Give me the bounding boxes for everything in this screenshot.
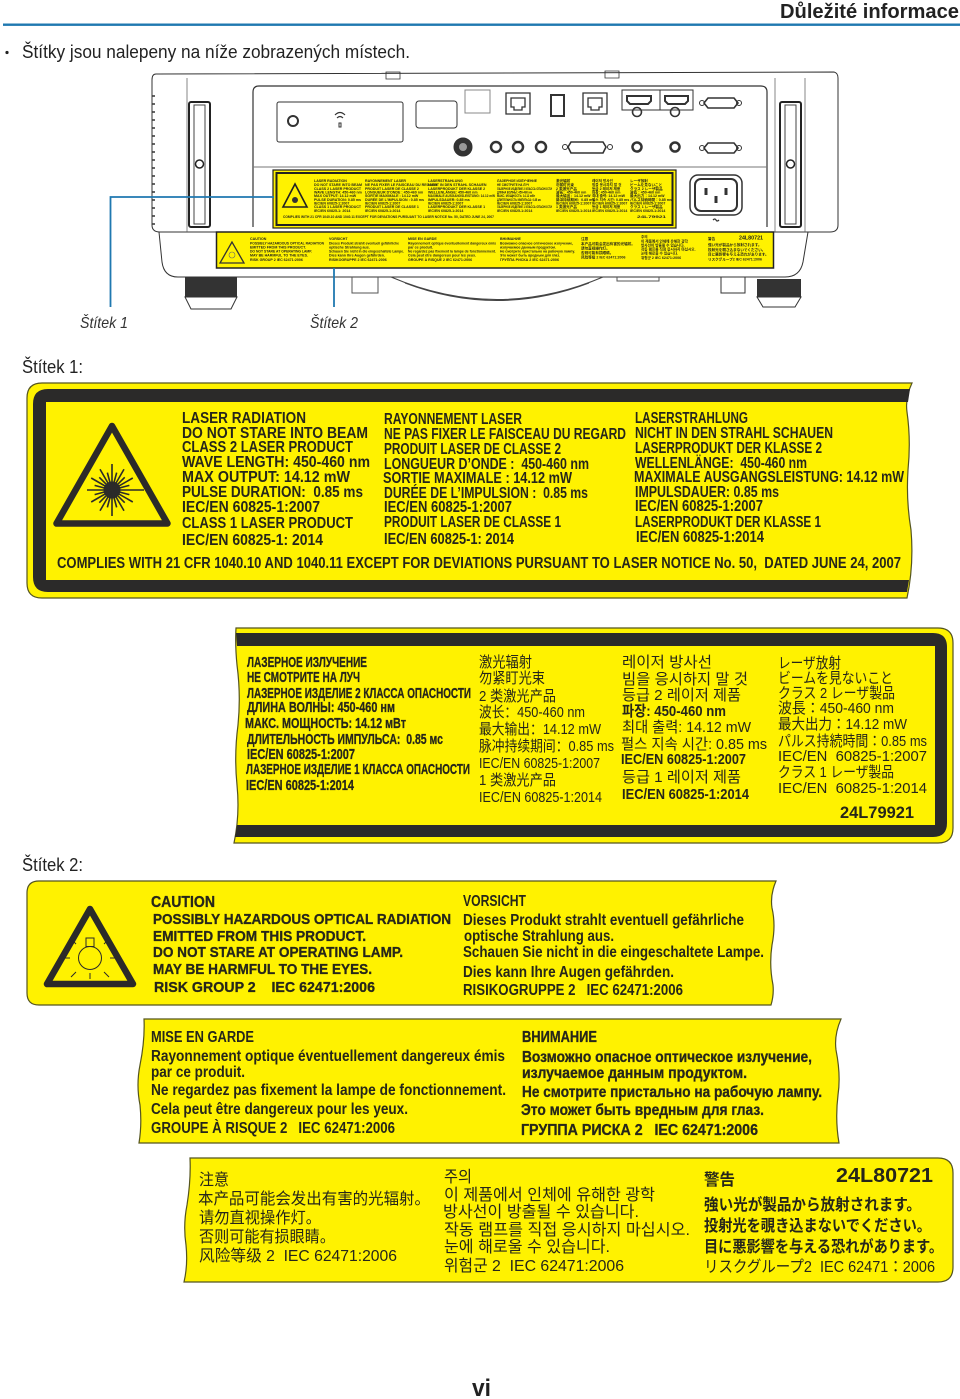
text: Chinese: 激光辐射 bbox=[479, 654, 532, 671]
text: Japanese: 投射光を覗き込まないでください。 bbox=[704, 1216, 931, 1235]
text: Russian: Это может быть вредным для глаз. bbox=[521, 1102, 764, 1119]
mini label 1 on projector: 最大出力：14.12 mW bbox=[630, 193, 665, 198]
projector rear drawing bbox=[152, 71, 838, 309]
text: Chinese: 波长：450-460 nm bbox=[479, 704, 585, 721]
text: Russian: ЛАЗЕРНОЕ ИЗДЕЛИЕ 1 КЛАССА ОПАСНОСТИ bbox=[246, 761, 470, 778]
text: English bbox=[182, 410, 370, 549]
text: Chinese: 请勿直视操作灯。 bbox=[199, 1209, 321, 1227]
mini label 1 on projector: LONGUEUR D'ONDE : 450-460 nm bbox=[365, 190, 423, 194]
mini label 1 on projector: 脉冲持续期间：0.85 ms bbox=[556, 197, 594, 202]
mini label 1 on projector: IEC/EN 60825-1:2014 bbox=[497, 209, 532, 213]
mini label 2 on projector: optische Strahlung aus. bbox=[329, 246, 370, 250]
mini label 2 on projector: MAY BE HARMFUL TO THE EYES. bbox=[250, 254, 308, 258]
text: French: PRODUIT LASER DE CLASSE 2 bbox=[384, 441, 561, 458]
text: German: LASERSTRAHLUNG bbox=[635, 410, 748, 427]
text: Japanese: 警告 bbox=[704, 1170, 735, 1189]
mini label 1 on projector: LASER RADIATION bbox=[314, 179, 347, 183]
mini label 2 on projector: 이 제품에서 인체에 유해한 광학 bbox=[641, 238, 689, 244]
bullet intro text: Štítky jsou nalepeny na níže zobrazených místech. bbox=[22, 41, 410, 62]
text: French: Ne regardez pas fixement la lampe de fonctionnement. bbox=[151, 1082, 506, 1099]
mini label 1 on projector: IEC/EN 60825-1:2014 bbox=[630, 209, 665, 213]
text: French: MISE EN GARDE bbox=[151, 1029, 254, 1046]
mini label 1 on projector: RAYONNEMENT LASER bbox=[365, 179, 406, 183]
text: English: RISK GROUP 2 IEC 62471:2006 bbox=[154, 979, 375, 996]
text: Chinese: 1 类激光产品 bbox=[479, 772, 556, 789]
text: Japanese: レーザ放射 bbox=[778, 655, 841, 672]
mini label 1 on projector: NE PAS FIXER LE FAISCEAU DU REGARD bbox=[365, 183, 438, 187]
yellow label shape bbox=[138, 1019, 841, 1143]
mini label 2 on projector: POSSIBLY HAZARDOUS OPTICAL RADIATION bbox=[250, 242, 324, 246]
text: Chinese bbox=[479, 654, 614, 806]
text: Russian: ДЛИНА ВОЛНЫ: 450-460 нм bbox=[247, 699, 395, 716]
mini label 2 on projector: DO NOT STARE AT OPERATING LAMP. bbox=[250, 250, 312, 254]
mini label 1 on projector: IMPULSDAUER: 0.85 ms bbox=[428, 198, 470, 202]
mini label 2 on projector: 投射光を覗き込まないでください。 bbox=[708, 247, 765, 252]
text: Russian bbox=[521, 1029, 822, 1139]
text: French bbox=[151, 1029, 506, 1137]
text: German: IEC/EN 60825-1:2014 bbox=[636, 529, 764, 546]
mini label 1 on projector: ビームを見ないこと bbox=[630, 182, 663, 187]
mini label 1 on projector: MAX OUTPUT: 14.12 mW bbox=[314, 194, 357, 198]
text: Chinese: IEC/EN 60825-1:2014 bbox=[479, 789, 602, 806]
text: Chinese: 脉冲持续期间：0.85 ms bbox=[479, 738, 614, 755]
mini label 2 on projector: ВНИМАНИЕ bbox=[500, 237, 522, 241]
mini label 1 on projector: 激光辐射 bbox=[556, 178, 571, 183]
text: German: IEC/EN 60825-1:2007 bbox=[635, 498, 763, 515]
mini label 2 on projector: 24L80721 bbox=[739, 236, 763, 242]
mini label 1 on projector: IEC/EN 60825-1:2007 bbox=[556, 202, 591, 206]
icon: lamp warning triangle bbox=[47, 909, 133, 984]
text: French: IEC/EN 60825-1:2007 bbox=[384, 499, 512, 516]
mini label 1 on projector: МАКС. МОЩНОСТЬ: 14.12 мВт bbox=[497, 194, 535, 198]
text: French: NE PAS FIXER LE FAISCEAU DU REGARD bbox=[384, 426, 626, 443]
yellow label shape bbox=[184, 1158, 953, 1282]
mini label 1 on projector: 등급 1 레이저 제품 bbox=[592, 204, 621, 209]
text: Korean: IEC/EN 60825-1:2014 bbox=[622, 786, 750, 803]
mini label 2 on projector: EMITTED FROM THIS PRODUCT. bbox=[250, 246, 306, 250]
text: Korean bbox=[621, 654, 767, 803]
text: German: IMPULSDAUER: 0.85 ms bbox=[635, 484, 779, 501]
mini label 1 on projector: 레이저 방사선 bbox=[592, 178, 613, 183]
caption: Štítek 1: Štítek 1 bbox=[80, 313, 128, 332]
text: English: PULSE DURATION: 0.85 ms bbox=[182, 484, 363, 501]
text: Russian: ГРУППА РИСКА 2 IEC 62471:2006 bbox=[521, 1122, 758, 1139]
text: French: PRODUIT LASER DE CLASSE 1 bbox=[384, 514, 561, 531]
mini label 1 on projector: 最大输出：14.12 mW bbox=[556, 193, 591, 198]
text: Japanese: クラス 2 レーザ製品 bbox=[778, 685, 895, 702]
mini label 1 on projector: IEC/EN 60825-1:2014 bbox=[428, 209, 463, 213]
mini label 1 on projector: 波长：450-460 nm bbox=[556, 190, 586, 194]
text: German: WELLENLÄNGE: 450-460 nm bbox=[635, 455, 807, 472]
panel: label 2 Chinese, Korean, Japanese bbox=[184, 1158, 953, 1282]
mini label 2 on projector bbox=[216, 232, 774, 268]
text: English: IEC/EN 60825-1: 2014 bbox=[182, 532, 323, 549]
text: Russian: ЛАЗЕРНОЕ ИЗЛУЧЕНИЕ bbox=[247, 654, 367, 671]
text: German: RISIKOGRUPPE 2 IEC 62471:2006 bbox=[463, 982, 683, 999]
mini label 1 on projector: IEC/EN 60825-1:2007 bbox=[497, 202, 532, 206]
mini label 1 on projector: НЕ СМОТРИТЕ НА ЛУЧ bbox=[497, 183, 529, 187]
mini label 1 on projector: IEC/EN 60825-1: 2014 bbox=[314, 209, 350, 213]
mini label 1 on projector: IEC/EN 60825-1:2007 bbox=[314, 202, 349, 206]
mini label 1 on projector: DO NOT STARE INTO BEAM bbox=[314, 183, 362, 187]
mini label 1 on projector: 1 类激光产品 bbox=[556, 204, 577, 209]
mini label 1 on projector: 빔을 응시하지 말 것 bbox=[592, 182, 622, 187]
mini label 1 on projector: IEC/EN 60825-1:2007 bbox=[428, 202, 463, 206]
text: German: Dies kann Ihre Augen gefährden. bbox=[463, 964, 674, 981]
mini label 1 on projector: ЛАЗЕРНОЕ ИЗДЕЛИЕ 1 КЛАССА ОПАСНОСТИ bbox=[497, 205, 552, 209]
mini label 1 on projector: 勿紧盯光束 bbox=[556, 182, 574, 187]
mini label 1 on projector: ЛАЗЕРНОЕ ИЗДЕЛИЕ 2 КЛАССА ОПАСНОСТИ bbox=[497, 187, 552, 191]
text: English: EMITTED FROM THIS PRODUCT. bbox=[153, 928, 366, 945]
mini label 2 on projector: VORSICHT bbox=[329, 237, 348, 241]
mini label 1 on projector: CLASS 1 LASER PRODUCT bbox=[314, 205, 362, 209]
mini label 2 on projector: 작동 램프를 직접 응시하지 마십시오. bbox=[641, 246, 696, 252]
mini label 2 on projector: Возможно опасное оптическое излучение, bbox=[500, 242, 573, 246]
text: English: DO NOT STARE INTO BEAM bbox=[182, 425, 368, 442]
mini label 2 on projector: 위험군 2 IEC 62471:2006 bbox=[641, 255, 681, 260]
yellow label frame bbox=[234, 628, 953, 843]
mini label 2 on projector: リスクグループ2 IEC 62471:2006 bbox=[708, 256, 762, 262]
mini label 1 on projector: IEC/EN 60825-1:2014 bbox=[365, 209, 400, 213]
text: Korean: 파장: 450-460 nm bbox=[622, 703, 726, 720]
text: French: IEC/EN 60825-1: 2014 bbox=[384, 531, 514, 548]
text: Russian: ВНИМАНИЕ bbox=[522, 1029, 597, 1046]
mini label 2 on projector: 눈에 해로울 수 있습니다. bbox=[641, 250, 678, 256]
mini label 1 on projector: PRODUIT LASER DE CLASSE 2 bbox=[365, 187, 419, 191]
text: Korean: IEC/EN 60825-1:2007 bbox=[621, 751, 746, 768]
mini label 1 on projector: MAXIMALE AUSGANGSLEISTUNG: 14.12 mW bbox=[428, 194, 496, 198]
text: Japanese: IEC/EN 60825-1:2007 bbox=[778, 748, 927, 765]
mini label 2 on projector: CAUTION bbox=[250, 237, 267, 241]
mini label 2 on projector: GROUPE À RISQUE 2 IEC 62471:2006 bbox=[408, 257, 472, 262]
text: Russian: IEC/EN 60825-1:2007 bbox=[247, 746, 355, 763]
text: English: POSSIBLY HAZARDOUS OPTICAL RADIATION bbox=[153, 911, 451, 928]
text: Korean: 이 제품에서 인체에 유해한 광학 bbox=[444, 1186, 655, 1204]
text: English: LASER RADIATION bbox=[182, 410, 306, 427]
text: German: VORSICHT bbox=[463, 893, 526, 910]
text: Japanese: リスクグループ2 IEC 62471：2006 bbox=[704, 1258, 935, 1276]
mini label 2 on projector: 주의 bbox=[641, 234, 648, 239]
mini label 1 on projector: SORTIE MAXIMALE : 14.12 mW bbox=[365, 194, 419, 198]
mini label 2 on projector: 방사선이 방출될 수 있습니다. bbox=[641, 242, 685, 248]
mini label 2 on projector: Schauen Sie nicht in die eingeschaltete Lampe. bbox=[329, 250, 404, 254]
text: French bbox=[383, 411, 626, 548]
mini label 1 on projector: WELLENLÄNGE: 450-460 nm bbox=[428, 190, 478, 194]
text: English: MAX OUTPUT: 14.12 mW bbox=[182, 469, 350, 486]
text: Korean bbox=[443, 1168, 690, 1275]
mini label 2 on projector: RISK GROUP 2 IEC 62471:2006 bbox=[250, 258, 303, 262]
mini label 2 on projector: 请勿直视操作灯。 bbox=[581, 246, 610, 250]
mini label 1 on projector: IEC/EN 60825-1:2014 bbox=[592, 209, 627, 213]
page header: Důležité informace: Důležité informace bbox=[780, 1, 959, 23]
mini label 2 on projector: ГРУППА РИСКА 2 IEC 62471:2006 bbox=[500, 258, 559, 262]
text: Japanese: クラス 1 レーザ製品 bbox=[778, 764, 894, 781]
mini label 2 on projector: 強い光が製品から放射されます。 bbox=[708, 242, 762, 247]
mini label 1 on projector: ДЛИНА ВОЛНЫ: 450-460 нм bbox=[497, 190, 532, 194]
text: Chinese: 注意 bbox=[199, 1170, 229, 1189]
text: Russian: Не смотрите пристально на рабочую лампу. bbox=[522, 1084, 822, 1101]
mini label 1 on projector: クラス 2 レーザ製品 bbox=[630, 186, 663, 191]
mini label 2 on projector: Ne regardez pas fixement la lampe de fonctionnement. bbox=[408, 250, 496, 254]
text: Chinese bbox=[198, 1170, 430, 1265]
text: Japanese: 最大出力：14.12 mW bbox=[778, 716, 908, 733]
mini label 2 on projector: 否则可能有损眼睛。 bbox=[581, 250, 613, 255]
text: Korean: 등급 1 레이저 제품 bbox=[622, 769, 741, 786]
panel: label 1 left part bbox=[27, 383, 912, 598]
mini label 1 on projector: 펄스 지속 시간: 0.85 ms bbox=[592, 197, 629, 202]
text: English: CLASS 2 LASER PRODUCT bbox=[182, 439, 353, 456]
text: Chinese: 风险等级 2 IEC 62471:2006 bbox=[199, 1247, 397, 1265]
text: Chinese: 本产品可能会发出有害的光辐射。 bbox=[198, 1190, 430, 1208]
panel: label 2 French and Russian bbox=[138, 1019, 841, 1143]
text: English: DO NOT STARE AT OPERATING LAMP. bbox=[153, 944, 403, 961]
part number 24L79921: 24L79921 bbox=[840, 803, 914, 822]
mini label 2 on projector: Dies kann Ihre Augen gefährden. bbox=[329, 254, 385, 258]
mini label 1 on projector: 파장: 450-460 nm bbox=[592, 190, 620, 194]
mini label 1 on projector: IEC/EN 60825-1:2007 bbox=[365, 202, 400, 206]
text: Korean: 위험군 2 IEC 62471:2006 bbox=[444, 1257, 624, 1275]
mini label 1 on projector: PULSE DURATION: 0.85 ms bbox=[314, 198, 361, 202]
mini label 1 on projector: レーザ放射 bbox=[630, 178, 648, 183]
text: English: MAY BE HARMFUL TO THE EYES. bbox=[153, 961, 372, 978]
text: Russian: IEC/EN 60825-1:2014 bbox=[246, 777, 354, 794]
text: Russian: излучаемое данным продуктом. bbox=[522, 1065, 747, 1082]
text: Japanese bbox=[778, 655, 927, 797]
yellow label frame bbox=[27, 383, 912, 598]
text: German: Dieses Produkt strahlt eventuell gefährliche bbox=[463, 912, 744, 929]
mini label 1 on projector: ЛАЗЕРНОЕ ИЗЛУЧЕНИЕ bbox=[497, 179, 538, 183]
text: Japanese: ビームを見ないこと bbox=[778, 670, 893, 687]
text: Japanese bbox=[704, 1170, 943, 1276]
mini label 1 on projector: IEC/EN 60825-1:2007 bbox=[592, 202, 627, 206]
connector panel bbox=[277, 90, 742, 156]
text: German: LASERPRODUKT DER KLASSE 2 bbox=[635, 440, 822, 457]
text: Korean: 빔을 응시하지 말 것 bbox=[622, 671, 748, 688]
mini label 1 on projector bbox=[273, 170, 676, 228]
mini label 1 on projector: ДЛИТЕЛЬНОСТЬ ИМПУЛЬСА: 0.85 мс bbox=[497, 198, 541, 202]
text: French: LONGUEUR D’ONDE : 450-460 nm bbox=[384, 456, 589, 473]
text: Chinese: 2 类激光产品 bbox=[479, 688, 556, 705]
text: English bbox=[151, 894, 451, 996]
mini label 2 on projector: MISE EN GARDE bbox=[408, 237, 437, 241]
text: Korean: 펄스 지속 시간: 0.85 ms bbox=[621, 736, 767, 753]
mini label 1 on projector: 波長：450-460 nm bbox=[630, 190, 660, 194]
mini label 1 on projector: クラス 1 レーザ製品 bbox=[630, 204, 663, 209]
mini label 1 on projector: COMPLIES WITH 21 CFR 1040.10 AND 1040.11 EXCEPT FOR DEVIATIONS PURSUANT TO LASER NOTICE No. 50, DATED JUNE 24, 2007 bbox=[283, 215, 494, 219]
mini label 1 on projector: IEC/EN 60825-1:2014 bbox=[556, 209, 591, 213]
mini label 2 on projector: Это может быть вредным для глаз. bbox=[500, 254, 560, 258]
text: Russian: ЛАЗЕРНОЕ ИЗДЕЛИЕ 2 КЛАССА ОПАСНОСТИ bbox=[247, 685, 471, 702]
text: German: optische Strahlung aus. bbox=[464, 928, 614, 945]
text: French: Rayonnement optique éventuellement dangereux émis bbox=[151, 1048, 505, 1065]
mini label 1 on projector: LASERPRODUKT DER KLASSE 1 bbox=[428, 205, 485, 209]
text: Russian: НЕ СМОТРИТЕ НА ЛУЧ bbox=[247, 669, 360, 686]
text: English: CAUTION bbox=[151, 894, 215, 911]
text: Japanese: パルス持続時間：0.85 ms bbox=[778, 733, 927, 750]
leader lines to labels bbox=[110, 197, 334, 307]
mini label 1 on projector: 최대 출력: 14.12 mW bbox=[592, 193, 626, 198]
text: English: CLASS 1 LASER PRODUCT bbox=[182, 515, 353, 532]
mini label 2 on projector: 目に悪影響を与える恐れがあります。 bbox=[708, 252, 769, 256]
mini label 1 on projector: PRODUIT LASER DE CLASSE 1 bbox=[365, 205, 419, 209]
text: French: Cela peut être dangereux pour les yeux. bbox=[151, 1101, 408, 1118]
panel: label 1 right part bbox=[234, 628, 953, 843]
text: English: WAVE LENGTH: 450-460 nm bbox=[182, 454, 370, 471]
text: Korean: 작동 램프를 직접 응시하지 마십시오. bbox=[444, 1221, 690, 1239]
mini label 1 on projector: LASERPRODUKT DER KLASSE 2 bbox=[428, 187, 485, 191]
mini label 2 on projector: 本产品可能会发出有害的光辐射。 bbox=[581, 241, 635, 246]
projector body outline bbox=[152, 71, 838, 277]
text: French: RAYONNEMENT LASER bbox=[384, 411, 522, 428]
text: Korean: 등급 2 레이저 제품 bbox=[622, 687, 741, 704]
text: German: LASERPRODUKT DER KLASSE 1 bbox=[635, 514, 821, 531]
heading: Štítek 2: Štítek 2: bbox=[22, 854, 83, 875]
mini label 2 on projector: Dieses Produkt strahlt eventuell gefährliche bbox=[329, 242, 399, 246]
text: Korean: 최대 출력: 14.12 mW bbox=[622, 719, 752, 736]
text: Japanese: 強い光が製品から放射されます。 bbox=[704, 1195, 921, 1214]
mini label 2 on projector: Не смотрите пристально на рабочую лампу. bbox=[500, 250, 575, 254]
text: German bbox=[463, 893, 764, 999]
feet and handle bbox=[185, 277, 801, 309]
text: German: Schauen Sie nicht in die eingeschaltete Lampe. bbox=[463, 944, 764, 961]
mini label 1 on projector: IEC/EN 60825-1:2007 bbox=[630, 202, 665, 206]
mini label 2 on projector: RISIKOGRUPPE 2 IEC 62471:2006 bbox=[329, 258, 387, 262]
text: English: IEC/EN 60825-1:2007 bbox=[182, 499, 320, 516]
text: German: MAXIMALE AUSGANGSLEISTUNG: 14.12 mW bbox=[634, 469, 904, 486]
text: Chinese: 否则可能有损眼睛。 bbox=[199, 1228, 335, 1246]
mini label 2 on projector: Cela peut être dangereux pour les yeux. bbox=[408, 254, 476, 258]
text: Chinese: 勿紧盯光束 bbox=[479, 670, 545, 687]
text: Russian: Возможно опасное оптическое излучение, bbox=[522, 1049, 812, 1066]
text: Russian bbox=[245, 654, 471, 794]
icon: laser warning triangle bbox=[56, 426, 168, 524]
text: Japanese: IEC/EN 60825-1:2014 bbox=[778, 780, 927, 797]
text: Korean: 눈에 해로울 수 있습니다. bbox=[444, 1238, 610, 1256]
mini label 1 on projector: パルス持続時間：0.85 ms bbox=[630, 197, 672, 202]
power inlet bbox=[690, 175, 742, 221]
mini label 2 on projector: 风险等级 2 IEC 62471:2006 bbox=[581, 254, 626, 260]
yellow label shape bbox=[27, 881, 776, 1005]
text: Russian: МАКС. МОЩНОСТЬ: 14.12 мВт bbox=[245, 715, 406, 732]
text: French: par ce produit. bbox=[151, 1064, 245, 1081]
text: French: SORTIE MAXIMALE : 14.12 mW bbox=[383, 470, 572, 487]
text: Chinese: 最大输出：14.12 mW bbox=[479, 721, 602, 738]
mini label 1 on projector: NICHT IN DEN STRAHL SCHAUEN bbox=[428, 183, 487, 187]
mini label 2 on projector: излучаемое данным продуктом. bbox=[500, 246, 556, 250]
part number 24L80721: 24L80721 bbox=[836, 1165, 933, 1187]
mini label 2 on projector: Rayonnement optique éventuellement dangereux émis bbox=[408, 242, 496, 246]
caption: Štítek 2: Štítek 2 bbox=[310, 313, 358, 332]
text: French: DURÉE DE L’IMPULSION : 0.85 ms bbox=[384, 485, 588, 502]
mini label 2 on projector: par ce produit. bbox=[408, 246, 433, 250]
mini label 1 on projector: LASERSTRAHLUNG bbox=[428, 179, 463, 183]
mini label 1 on projector: WAVE LENGTH: 450-460 nm bbox=[314, 190, 362, 194]
text: German: NICHT IN DEN STRAHL SCHAUEN bbox=[635, 425, 833, 442]
text: Korean: 방사선이 방출될 수 있습니다. bbox=[443, 1203, 639, 1221]
text: Chinese: IEC/EN 60825-1:2007 bbox=[479, 755, 600, 772]
panel: label 2 English and German bbox=[27, 881, 776, 1005]
text: Korean: 주의 bbox=[444, 1168, 472, 1186]
mini label 1 on projector: 등급 2 레이저 제품 bbox=[592, 186, 621, 191]
mini label 1 on projector: CLASS 2 LASER PRODUCT bbox=[314, 187, 362, 191]
text: Japanese: 波長：450-460 nm bbox=[778, 700, 894, 717]
text: German bbox=[634, 410, 904, 546]
heading: Štítek 1: Štítek 1: bbox=[22, 356, 83, 377]
text: Korean: 레이저 방사선 bbox=[622, 654, 712, 671]
mini label 1 on projector: DURÉE DE L'IMPULSION : 0.85 ms bbox=[365, 197, 424, 202]
mini label 2 on projector: 注意 bbox=[581, 236, 589, 241]
side vents bbox=[152, 96, 801, 227]
mini label 1 on projector: 2 类激光产品 bbox=[556, 186, 577, 191]
text: French: GROUPE À RISQUE 2 IEC 62471:2006 bbox=[151, 1118, 395, 1137]
mini label 1 on projector: 24L79921 bbox=[637, 215, 666, 219]
mini label 2 on projector: 警告 bbox=[708, 236, 716, 241]
text: Russian: ДЛИТЕЛЬНОСТЬ ИМПУЛЬСА: 0.85 мс bbox=[247, 731, 443, 748]
